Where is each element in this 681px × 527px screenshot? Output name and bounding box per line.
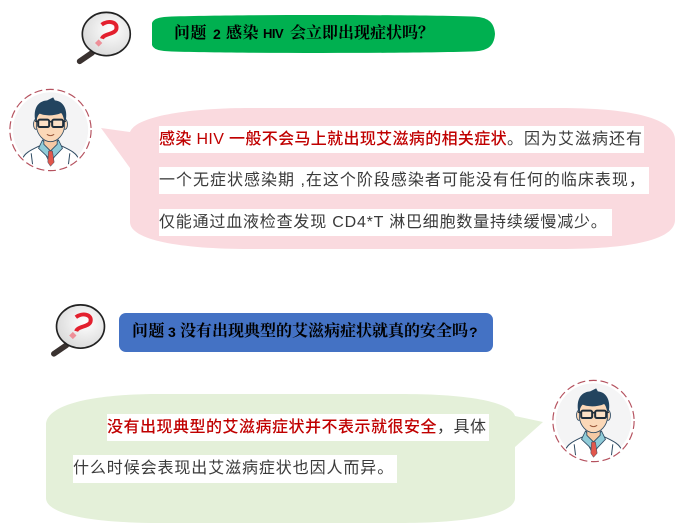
answer 2 text block: 仅能通过血液检查发现 CD4*T 淋巴细胞数量持续缓慢减少。 [159,214,608,231]
answer 2 text block [159,126,649,236]
answer 3 text block: 没有出现典型的艾滋病症状并不表示就很安全，具体 [107,419,487,436]
heading: question 2 green banner: 感染 [226,25,259,42]
answer 2 text block: 感染 HIV 一般不会马上就出现艾滋病的相关症状。因为艾滋病还有 [159,131,643,148]
heading: question 3 blue banner: 没有出现典型的艾滋病症状就真的安全吗 [180,323,468,340]
icon: doctor avatar (question 3) [552,380,635,462]
heading: question 2 green banner: 会立即出现症状吗？ [290,25,434,42]
heading: question 2 green banner [152,15,495,53]
answer 2 text block: 一个无症状感染期 ,在这个阶段感染者可能没有任何的临床表现， [159,172,646,189]
answer 3 text block [73,414,489,483]
heading: question 3 blue banner: 问题 [132,323,165,340]
heading: question 3 blue banner [119,313,493,352]
icon: magnifier with question mark (question 3) [51,304,106,357]
heading: question 3 blue banner: ? [469,324,478,340]
heading: question 2 green banner: 问题 [174,25,207,42]
panel: green speech bubble answer 3 [46,394,543,523]
heading: question 2 green banner: HIV [263,26,283,41]
panel: pink speech bubble answer 2 [101,108,675,249]
icon: magnifier with question mark (question 2) [76,12,132,64]
heading: question 3 blue banner: 3 [168,324,176,340]
icon: doctor avatar (question 2) [9,88,92,172]
heading: question 2 green banner: 2 [213,26,221,42]
answer 3 text block: 什么时候会表现出艾滋病症状也因人而异。 [73,460,394,477]
